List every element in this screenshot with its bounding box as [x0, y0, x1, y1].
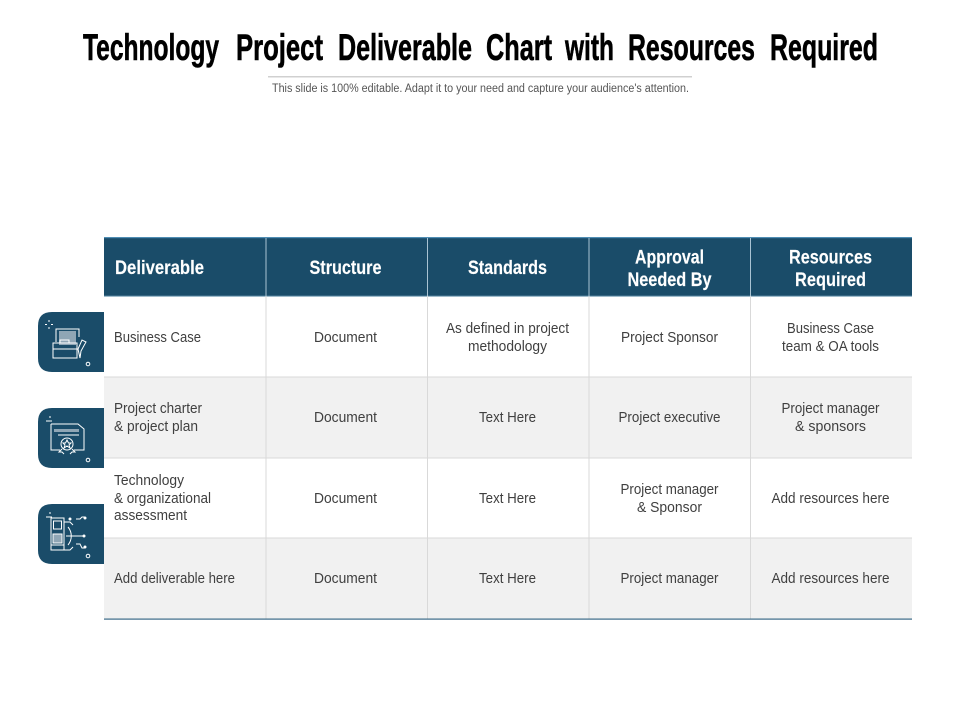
row: Technology assessment [114, 473, 890, 524]
header row: Required [795, 270, 866, 291]
row: Business Case: As defined in project [446, 321, 569, 337]
icon: digital media network [38, 504, 104, 564]
row: Project charter: Project manager [782, 401, 880, 417]
row: Project charter: & sponsors [795, 419, 866, 435]
title: with [564, 27, 614, 68]
row: Project charter: Project executive [618, 410, 720, 426]
header row: Needed By [628, 270, 712, 291]
row: Technology assessment: Text Here [479, 491, 536, 507]
header row [104, 237, 912, 297]
row: Business Case: team & OA tools [782, 339, 879, 355]
header row: Structure [310, 258, 382, 279]
row: Project charter: Project charter [114, 401, 202, 417]
row: Add deliverable: Document [314, 571, 377, 587]
row: Add deliverable: Add resources here [772, 571, 890, 587]
row: Project charter: & project plan [114, 419, 198, 435]
icon: briefcase and document [38, 312, 104, 372]
row: Project charter [114, 401, 880, 435]
row: Business Case: Business Case [114, 330, 201, 346]
header row: Standards [468, 258, 547, 279]
table [104, 237, 912, 620]
row: Technology assessment: Technology [114, 473, 185, 489]
title [83, 27, 878, 68]
title: Deliverable [338, 27, 472, 68]
row: Add deliverable: Text Here [479, 571, 536, 587]
row: Business Case [114, 321, 879, 355]
row: Business Case: Business Case [787, 321, 874, 337]
row: Project charter: Text Here [479, 410, 536, 426]
row: Technology assessment: & organizational [114, 491, 211, 507]
row: Technology assessment: Add resources here [772, 491, 890, 507]
header row: Resources [789, 248, 872, 268]
title: Project [236, 27, 323, 68]
row: Technology assessment: assessment [114, 508, 187, 524]
row: Add deliverable: Add deliverable here [114, 571, 235, 587]
row: Technology assessment: Project manager [620, 482, 719, 498]
header row: Approval [635, 248, 704, 268]
row: Technology assessment: Document [314, 491, 377, 507]
row: Technology assessment: & Sponsor [637, 500, 702, 516]
title: Technology [83, 27, 219, 68]
row: Add deliverable [114, 571, 890, 587]
row: Business Case: Document [314, 330, 377, 346]
title: Resources [628, 27, 755, 68]
row: Add deliverable: Project manager [620, 571, 719, 587]
title: Required [770, 27, 878, 68]
title: Chart [486, 27, 552, 68]
row: Business Case: Project Sponsor [621, 330, 718, 346]
header row: Deliverable [115, 258, 204, 279]
subtitle: This slide is 100% editable. Adapt it to your need and capture your audience's attention. [272, 83, 689, 95]
icon: certificate [38, 408, 104, 468]
row: Business Case: methodology [468, 339, 548, 355]
row: Project charter: Document [314, 410, 377, 426]
